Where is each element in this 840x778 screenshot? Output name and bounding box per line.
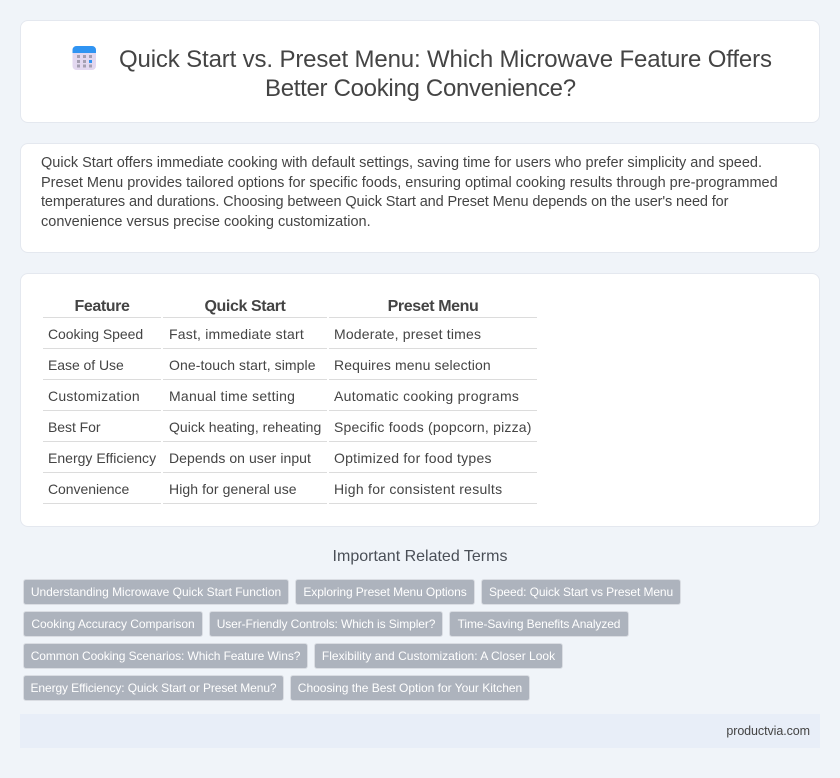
table: Fast, immediate start — [169, 326, 304, 342]
title: Quick Start vs. Preset Menu: Which Microwave Feature Offers — [119, 46, 772, 73]
related terms tags: Understanding Microwave Quick Start Function — [31, 585, 281, 599]
summary text — [41, 155, 778, 230]
table — [43, 298, 537, 504]
related terms heading: Important Related Terms — [333, 548, 507, 565]
title card — [20, 20, 820, 123]
summary text: convenience versus precise cooking customization. — [41, 214, 371, 230]
icon: calendar — [72, 46, 96, 70]
table: Automatic cooking programs — [334, 388, 519, 404]
footer source: productvia.com — [726, 724, 810, 738]
table: Manual time setting — [169, 388, 295, 404]
summary text: temperatures and durations. Choosing between Quick Start and Preset Menu depends on the user's need for — [41, 194, 728, 210]
summary card — [20, 143, 820, 253]
footer — [20, 714, 820, 748]
table: Customization — [48, 388, 140, 404]
table: Energy Efficiency — [48, 450, 156, 466]
table: Best For — [48, 419, 101, 435]
table: Quick Start — [205, 298, 285, 315]
related terms tags: Choosing the Best Option for Your Kitchen — [298, 681, 522, 695]
table: High for consistent results — [334, 481, 502, 497]
table: Cooking Speed — [48, 326, 143, 342]
table: High for general use — [169, 481, 297, 497]
related terms tags: Energy Efficiency: Quick Start or Preset Menu? — [31, 681, 276, 695]
summary text: Preset Menu provides tailored options for specific foods, ensuring optimal cooking results through pre-programmed — [41, 174, 778, 190]
table: Depends on user input — [169, 450, 311, 466]
table: Quick heating, reheating — [169, 419, 321, 435]
related terms tags: Cooking Accuracy Comparison — [31, 617, 195, 631]
related terms tags: Common Cooking Scenarios: Which Feature Wins? — [31, 649, 300, 663]
related terms tags: User-Friendly Controls: Which is Simpler? — [217, 617, 435, 631]
related terms tags — [23, 579, 681, 701]
table: Requires menu selection — [334, 357, 491, 373]
table: Preset Menu — [388, 298, 478, 315]
table: Optimized for food types — [334, 450, 492, 466]
summary text: Quick Start offers immediate cooking with default settings, saving time for users who prefer simplicity and speed. — [41, 155, 762, 171]
related terms tags: Flexibility and Customization: A Closer Look — [322, 649, 555, 663]
table: Moderate, preset times — [334, 326, 481, 342]
related terms tags: Time-Saving Benefits Analyzed — [458, 617, 620, 631]
title — [119, 46, 772, 102]
table: Feature — [74, 298, 130, 315]
related terms tags: Exploring Preset Menu Options — [303, 585, 467, 599]
table: Specific foods (popcorn, pizza) — [334, 419, 532, 435]
table: Ease of Use — [48, 357, 124, 373]
comparison table card — [20, 273, 820, 527]
table: Convenience — [48, 481, 129, 497]
table: One-touch start, simple — [169, 357, 316, 373]
related terms tags: Speed: Quick Start vs Preset Menu — [489, 585, 673, 599]
title: Better Cooking Convenience? — [265, 75, 576, 102]
